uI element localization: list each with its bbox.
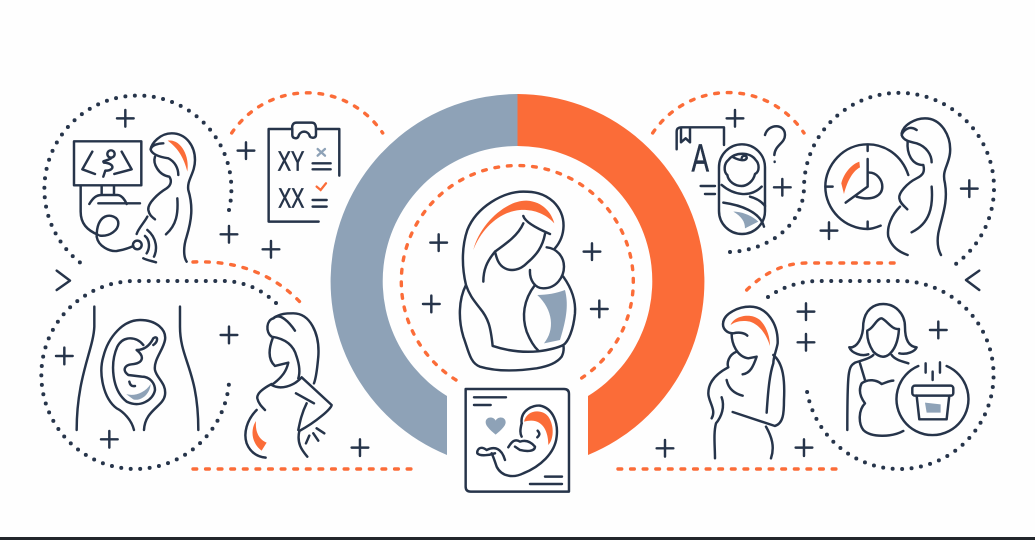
icon: pregnant woman	[888, 118, 950, 255]
dotted circle: top left	[44, 96, 231, 264]
icon: mother holding baby	[460, 192, 575, 370]
label: XY: XY	[278, 146, 305, 177]
dashed connector: left middle	[193, 262, 300, 302]
icon: chromosome clipboard	[269, 123, 339, 222]
donut ring: orange half	[518, 94, 704, 455]
icon: woman with steaming pot	[847, 304, 968, 436]
label: XX: XX	[278, 183, 305, 214]
dashed arc: above baby	[653, 93, 804, 133]
dashed line: bottom left	[193, 467, 413, 471]
icon: pregnant woman holding back	[245, 313, 332, 458]
bottom edge line	[0, 537, 1035, 540]
panel: central mother and scan	[423, 192, 608, 492]
icon: ultrasound monitor	[74, 141, 156, 257]
plus marks	[423, 234, 608, 317]
icon: left chevron mark	[57, 271, 70, 290]
donut ring: grey half	[331, 94, 518, 455]
inner dashed orange circle	[401, 166, 633, 380]
icon: ultrasound picture frame	[466, 389, 569, 492]
dashed connector: right middle	[747, 263, 897, 290]
icon: fetus in womb	[77, 307, 198, 430]
plus marks	[657, 303, 947, 457]
plus marks	[117, 110, 279, 258]
panel: nursing mother and woman with pot	[657, 271, 979, 458]
dashed line: bottom right	[618, 467, 839, 471]
icon: book, letter and swaddled baby	[677, 126, 785, 234]
dotted circle: top right	[730, 93, 994, 266]
panel: ultrasound scan with monitor, clipboard	[74, 110, 339, 262]
panel: fetus and pregnant woman	[56, 271, 368, 458]
icon: mother nursing	[708, 307, 784, 458]
icon: pregnant woman in profile	[137, 133, 195, 262]
dotted circle: bottom right	[768, 281, 994, 469]
dashed arc: above clipboard	[232, 93, 383, 133]
plus marks	[56, 327, 368, 456]
dotted circle: bottom left	[41, 281, 276, 469]
icon: clock	[825, 144, 908, 229]
plus marks	[727, 110, 978, 239]
icon: right chevron mark	[966, 271, 979, 290]
panel: baby, clock and pregnant woman	[677, 110, 978, 255]
label: A: A	[692, 137, 709, 181]
